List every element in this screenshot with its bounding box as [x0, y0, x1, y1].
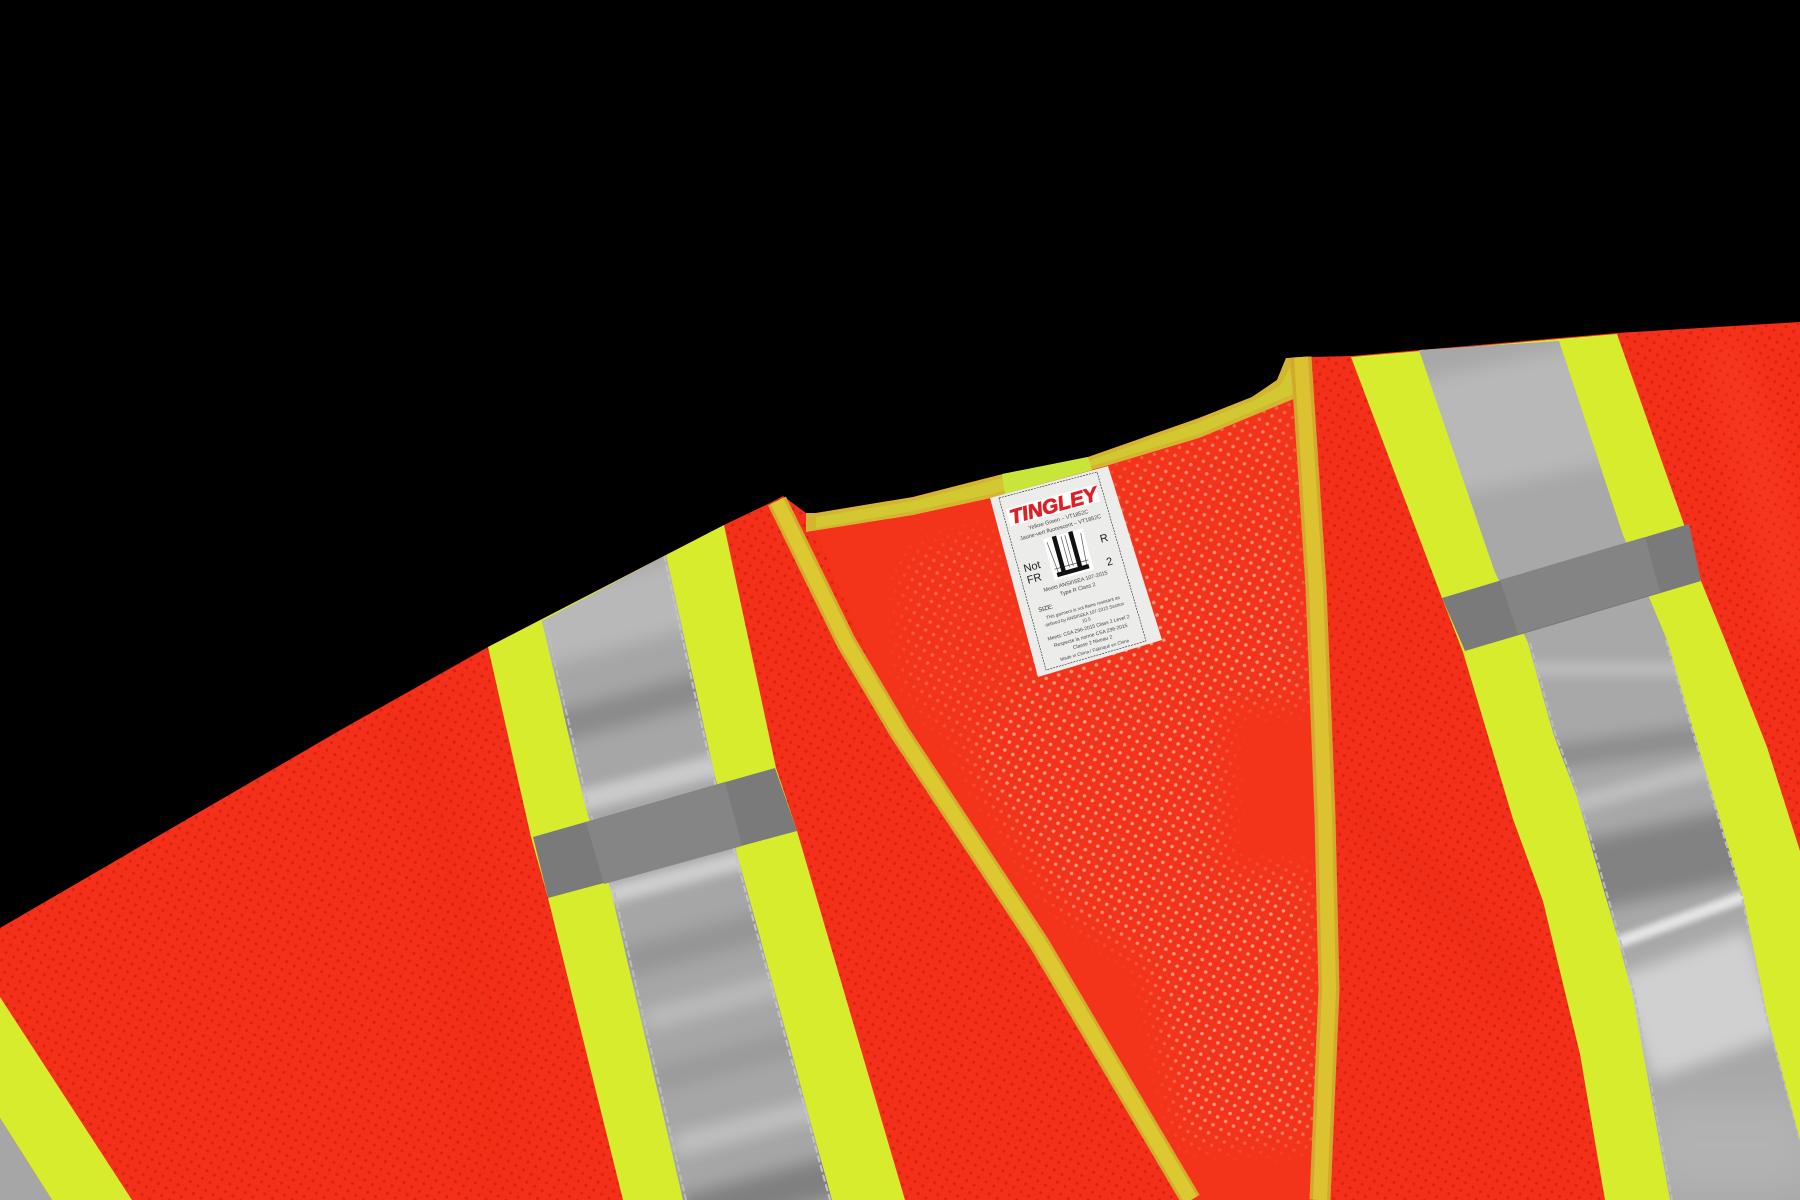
CSA line: Meets: CSA Z96-2015 Class 2 Level 2 [1047, 614, 1131, 643]
label text block [1005, 483, 1139, 665]
size: SIZE: [1038, 604, 1054, 614]
product name: Yellow Green – VT1852C [1028, 509, 1089, 532]
right stripe silver band [1419, 341, 1800, 1200]
right reflective stripe [1351, 332, 1800, 1200]
inner back panel mesh [800, 380, 1340, 1200]
CSA French: Respecte la norme CSA Z96-2015 [1053, 623, 1129, 649]
left stripe lime band [488, 525, 905, 1200]
rating Not: Not [1022, 559, 1042, 575]
left reflective stripe [488, 525, 922, 1200]
lower left stripe [0, 997, 132, 1200]
fabric fold shading [400, 340, 1800, 1200]
vest [0, 322, 1800, 1200]
label card [990, 466, 1162, 677]
flame notice line 2: defined by ANSI/ISEA 107-2015 Section [1045, 601, 1125, 628]
rating R: R [1099, 532, 1110, 546]
garment label [990, 466, 1162, 677]
product name French: Jaune-vert fluorescent – VT1852C [1019, 514, 1102, 542]
flame notice line 3: 10.5 [1081, 616, 1092, 624]
neck trim [806, 358, 1296, 532]
rating 2: 2 [1105, 556, 1114, 569]
origin: Made in China / Fabriqué en Chine [1060, 638, 1130, 662]
left grey strap [533, 768, 797, 898]
type line: Type R Class 2 [1059, 582, 1096, 598]
left stripe highlights [542, 555, 832, 1200]
left front placket trim [777, 501, 1191, 1200]
right front placket trim [1301, 357, 1329, 1200]
right stripe lime band [1351, 334, 1800, 1200]
label dashed border [999, 472, 1146, 670]
standard line: Meets ANSI/ISEA 107-2015 [1043, 570, 1108, 594]
icon: vest pictogram [1043, 528, 1094, 581]
brand logo: TINGLEY [1007, 483, 1102, 529]
CSA French class: Classe 2 Niveau 2 [1072, 634, 1113, 651]
right grey strap [1442, 524, 1701, 651]
vest body mesh [0, 322, 1800, 1200]
left stripe silver band [542, 555, 832, 1200]
right stripe highlights [1426, 344, 1800, 1200]
flame notice: This garment is not flame resistant as [1045, 595, 1121, 620]
rating FR: FR [1026, 571, 1043, 587]
